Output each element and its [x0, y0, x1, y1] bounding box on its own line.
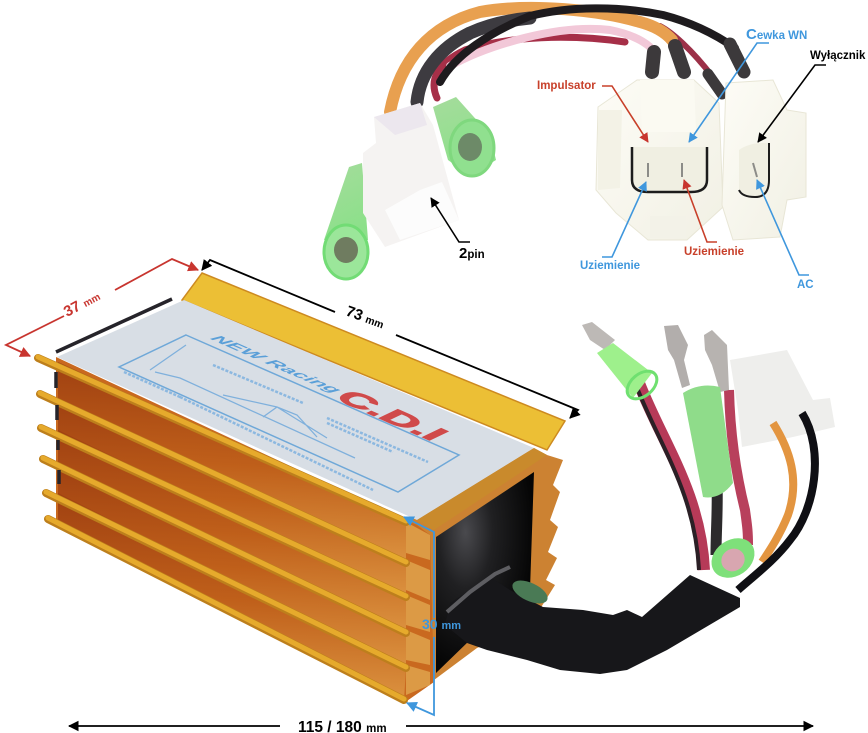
- green insulating sleeves: [597, 343, 762, 586]
- callout: Wyłącznik: Wyłącznik: [810, 50, 866, 62]
- connector: 2-pin housing: [722, 80, 806, 240]
- blue diagram frame: [119, 335, 459, 492]
- green terminal under cap: [509, 576, 551, 608]
- top wiring harness: [390, 8, 735, 112]
- dimension: 73 mm: [202, 260, 578, 418]
- callout: Uziemienie blue: [580, 182, 646, 272]
- dimension: 37 mm: [6, 259, 198, 356]
- wire: red-black: [637, 378, 704, 570]
- callout: 2pin: [431, 198, 485, 262]
- wrapped cable: [445, 575, 740, 674]
- end face: [404, 448, 563, 703]
- callout: Impulsator: [537, 80, 648, 142]
- dimension: 30 mm: 30 mm: [422, 616, 461, 632]
- silver top plate: [57, 300, 534, 520]
- dimension: 30 mm: [404, 517, 461, 715]
- callout: Cewka WN: Cewka WN: [746, 26, 807, 43]
- yellow top rail: [182, 273, 565, 450]
- fin tips: [406, 522, 430, 695]
- right-hand wiring: [634, 378, 815, 590]
- wire: black: [738, 413, 815, 590]
- callout: Impulsator: Impulsator: [537, 80, 596, 92]
- dimension: 73 mm: 73 mm: [344, 303, 387, 332]
- callout: Uziemienie red: [684, 180, 744, 258]
- callout: Wyłącznik: [758, 50, 866, 142]
- connector: 2-pin with green terminals: [324, 97, 496, 279]
- callout: Uziemienie red: Uziemienie: [684, 246, 744, 258]
- cable highlight: [447, 567, 510, 612]
- bullet terminals: [582, 322, 729, 392]
- dark left edge: [56, 299, 172, 484]
- callout: 2pin: 2pin: [459, 245, 485, 262]
- brand text: NEW Racing: [207, 333, 347, 395]
- wire: black center: [716, 480, 717, 555]
- C.D.I text: C.D.I: [327, 387, 456, 444]
- fins: [38, 357, 406, 700]
- heat-shrink sleeves: [652, 44, 744, 94]
- dimension: 37 mm: 37 mm: [61, 287, 103, 321]
- wire: red: [729, 390, 748, 545]
- CDI label printed on plate: [119, 333, 459, 492]
- potted black end cap: [436, 472, 534, 673]
- small printed marks: [124, 365, 428, 490]
- side channels: [56, 357, 434, 703]
- callout: Uziemienie blue: Uziemienie: [580, 260, 640, 272]
- connector: 4-pin housing: [596, 80, 723, 240]
- wire: orange: [762, 423, 793, 562]
- CDI module: heat sink body: [38, 273, 565, 703]
- plate edge: [417, 448, 547, 530]
- callout: Cewka WN: [689, 26, 807, 142]
- callout: AC: [757, 180, 814, 291]
- callout: AC: AC: [797, 279, 814, 291]
- ignition curve: [150, 345, 355, 458]
- channel shading: [58, 362, 406, 700]
- white plug: [730, 350, 835, 447]
